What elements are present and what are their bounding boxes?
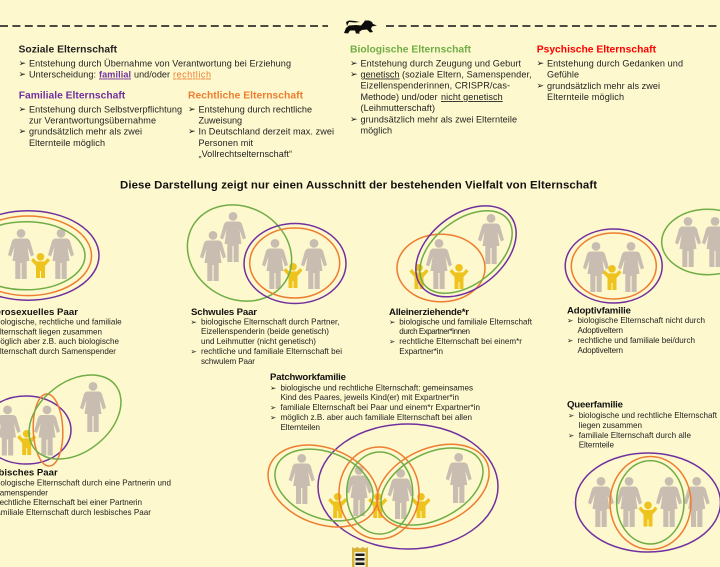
- description: biologische Elternschaft durch Partner,: [201, 318, 340, 326]
- heading: Rechtliche Elternschaft: [188, 90, 304, 102]
- description: ➢: [190, 347, 197, 356]
- panel: Rechtliche Elternschaft: [188, 90, 334, 159]
- description: familiale Elternschaft durch alle: [579, 431, 691, 440]
- panel: Psychische Elternschaft: [536, 44, 683, 102]
- text block: ➢: [18, 127, 26, 137]
- text block: ➢: [188, 127, 196, 137]
- description: [567, 316, 705, 355]
- text block: [18, 105, 182, 148]
- description: rechtliche und familiale bei/durch: [578, 336, 695, 345]
- text block: (Leihmutterschaft): [360, 103, 435, 113]
- text block: Entstehung durch Gedanken und: [547, 58, 683, 68]
- description: [190, 318, 342, 366]
- parenthood rings: [0, 211, 99, 300]
- text block: ➢: [18, 105, 26, 115]
- text block: ➢: [350, 115, 358, 125]
- description: und Leihmutter (nicht genetisch): [201, 337, 316, 346]
- text block: Entstehung durch rechtliche: [198, 105, 312, 115]
- description: [568, 411, 718, 450]
- panel: Adoptivfamilie: [565, 209, 720, 355]
- text block: ➢: [18, 70, 26, 80]
- panel: Familiale Elternschaft: [18, 90, 182, 148]
- heading: Psychische Elternschaft: [537, 44, 657, 56]
- panel: Schwules Paar: [170, 186, 346, 366]
- description: möglich z.B. aber auch familiale Elternschaft bei allen: [280, 413, 472, 422]
- parenthood rings: [576, 453, 720, 552]
- text block: Personen mit: [198, 138, 253, 148]
- description: liegen zusammen: [579, 421, 642, 430]
- description: ➢: [270, 403, 276, 412]
- icon: lion: [344, 20, 377, 34]
- label: Patchworkfamilie: [270, 372, 346, 383]
- family figures: [583, 217, 720, 292]
- text block: grundsätzlich mehr als zwei: [547, 81, 660, 91]
- text block: Elternteile möglich: [29, 138, 105, 148]
- panel: Alleinerziehende*r: [389, 187, 533, 356]
- description: Adoptiveltern: [578, 346, 623, 355]
- heading: Biologische Elternschaft: [350, 44, 472, 56]
- text block: [188, 105, 334, 159]
- description: ➢: [567, 316, 573, 325]
- text block: [350, 58, 532, 136]
- description: Expartner*in: [399, 347, 443, 356]
- description: biologische Elternschaft nicht durch: [578, 316, 705, 325]
- description: [270, 384, 480, 432]
- text block: Zuweisung: [198, 116, 242, 126]
- description: Elternteile: [579, 440, 614, 450]
- description: biologische und rechtliche Elternschaft: [579, 411, 718, 420]
- text block: zur Verantwortungsübernahme: [29, 116, 156, 126]
- description: Adoptiveltern: [578, 326, 623, 335]
- description: Eizellenspenderin (beide genetisch): [201, 327, 329, 336]
- text block: In Deutschland derzeit max. zwei: [198, 127, 334, 137]
- panel: Soziale Elternschaft: [18, 44, 291, 80]
- description: ➢: [270, 413, 276, 422]
- text block: Entstehung durch Zeugung und Geburt: [360, 58, 521, 68]
- description: ➢: [389, 337, 395, 346]
- panel: Biologische Elternschaft: [350, 44, 532, 136]
- label: Adoptivfamilie: [567, 306, 631, 316]
- text block: genetisch: [360, 70, 400, 80]
- text block: Methode) und/oder: [360, 92, 438, 102]
- panel: Heterosexuelles Paar: [0, 211, 122, 356]
- text block: [18, 58, 291, 80]
- parenthood rings: [397, 187, 533, 315]
- text block: [536, 58, 683, 102]
- header band with dashed line and lion: [0, 20, 720, 34]
- family figures: [289, 453, 472, 519]
- description: [0, 318, 122, 356]
- label: Schwules Paar: [191, 307, 257, 318]
- family figures: [200, 212, 327, 289]
- text block: nicht genetisch: [441, 92, 503, 102]
- text block: „Vollrechtselternschaft“: [198, 149, 292, 159]
- description: ➢: [567, 336, 573, 345]
- family figures: [0, 382, 106, 456]
- description: ➢: [568, 411, 574, 420]
- text block: Entstehung durch Selbstverpflichtung: [29, 105, 182, 115]
- description: ➢: [568, 431, 574, 440]
- description: biologische und familiale Elternschaft: [399, 318, 533, 326]
- text block: grundsätzlich mehr als zwei: [29, 127, 142, 137]
- text block: möglich: [360, 126, 392, 136]
- family figures: [410, 214, 504, 289]
- description: [389, 318, 533, 356]
- label: Alleinerziehende*r: [389, 307, 469, 318]
- description: Kind des Paares, jeweils Kind(er) mit Expartner*in: [280, 393, 459, 402]
- description: schwulem Paar: [201, 357, 255, 366]
- text block: Elternteile möglich: [547, 92, 624, 102]
- text block: rechtlich: [173, 70, 211, 80]
- heading: Familiale Elternschaft: [19, 90, 126, 102]
- parenthood rings: [256, 424, 502, 549]
- description: ➢: [270, 384, 276, 392]
- text block: grundsätzlich mehr als zwei Elternteile: [360, 114, 517, 124]
- description: biologische und rechtliche Elternschaft: gemeinsames: [280, 384, 473, 393]
- description: ➢: [190, 318, 197, 326]
- panel: Patchworkfamilie: [256, 372, 502, 549]
- text block: ➢: [536, 59, 544, 69]
- description: ➢: [389, 318, 395, 326]
- description: durch Expartner*innen: [399, 327, 470, 336]
- text block: ➢: [536, 82, 544, 92]
- parenthood rings: [565, 209, 720, 303]
- description: rechtliche und familiale Elternschaft bei: [201, 347, 342, 356]
- family figures: [588, 477, 710, 527]
- icon: coat of arms: [352, 547, 368, 567]
- description: [0, 479, 171, 517]
- text block: ➢: [188, 105, 196, 115]
- description: rechtliche Elternschaft bei einem*r: [399, 337, 522, 346]
- text block: Eizellenspenderinnen, CRISPR/cas-: [360, 81, 510, 91]
- label: Queerfamilie: [567, 400, 623, 411]
- text block: Entstehung durch Übernahme von Verantwortung bei Erziehung: [29, 58, 291, 68]
- title: Diese Darstellung zeigt nur einen Ausschnitt der bestehenden Vielfalt von Elternschaft: [120, 180, 597, 192]
- text block: und/oder: [134, 70, 170, 80]
- description: familiale Elternschaft bei Paar und einem*r Expartner*in: [280, 403, 480, 412]
- parenthood rings: [0, 358, 137, 476]
- parenthood rings: [170, 186, 346, 320]
- text block: ➢: [18, 59, 26, 69]
- heading: Soziale Elternschaft: [18, 44, 118, 56]
- description: rechtliche Elternschaft bei einer Partnerin: [0, 498, 142, 507]
- panel: Queerfamilie: [567, 400, 720, 552]
- text block: Gefühle: [547, 70, 579, 80]
- text block: familial: [99, 70, 131, 80]
- description: Elternteilen: [280, 423, 320, 432]
- text block: Unterscheidung:: [29, 70, 96, 80]
- text block: (soziale Eltern, Samenspender,: [402, 70, 532, 80]
- panel: Lesbisches Paar: [0, 358, 171, 517]
- text block: ➢: [350, 59, 358, 69]
- text block: ➢: [350, 70, 358, 80]
- family figures: [8, 229, 74, 279]
